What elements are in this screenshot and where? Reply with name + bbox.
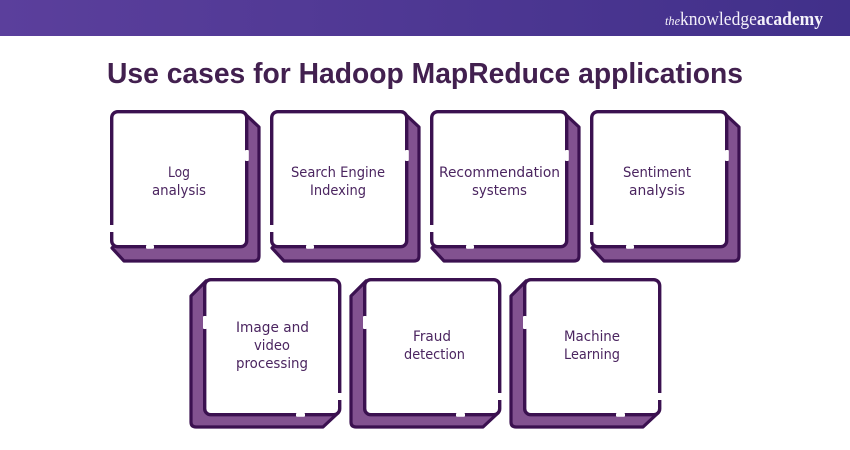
card: Search Engine Indexing	[269, 112, 419, 261]
header banner	[0, 0, 850, 36]
card: Sentiment analysis: Sentiment	[623, 165, 691, 181]
logo: theknowledgeacademy	[665, 10, 824, 30]
card: Image and video processing: processing	[236, 356, 308, 372]
card: Recommendation systems: systems	[472, 183, 527, 199]
card: Machine Learning: Learning	[564, 347, 620, 363]
card: Search Engine Indexing: Search Engine	[291, 165, 385, 181]
title: Use cases for Hadoop MapReduce applications	[107, 58, 743, 90]
card: Image and video processing: video	[254, 338, 290, 354]
card: Image and video processing	[191, 280, 342, 427]
card: Machine Learning	[511, 280, 662, 427]
card: Log analysis	[109, 112, 259, 261]
card: Recommendation systems: Recommendation	[439, 165, 560, 181]
card: Machine Learning: Machine	[564, 329, 620, 345]
card: Fraud detection	[351, 280, 502, 427]
card: Log analysis: analysis	[152, 183, 206, 199]
card: Fraud detection: Fraud	[413, 329, 451, 345]
card: Log analysis: Log	[168, 165, 190, 181]
card: Search Engine Indexing: Indexing	[310, 183, 366, 199]
card: Fraud detection: detection	[404, 347, 465, 363]
card: Image and video processing: Image and	[236, 320, 309, 336]
card: Recommendation systems	[429, 112, 579, 261]
card: Sentiment analysis	[589, 112, 739, 261]
card: Sentiment analysis: analysis	[629, 183, 685, 199]
